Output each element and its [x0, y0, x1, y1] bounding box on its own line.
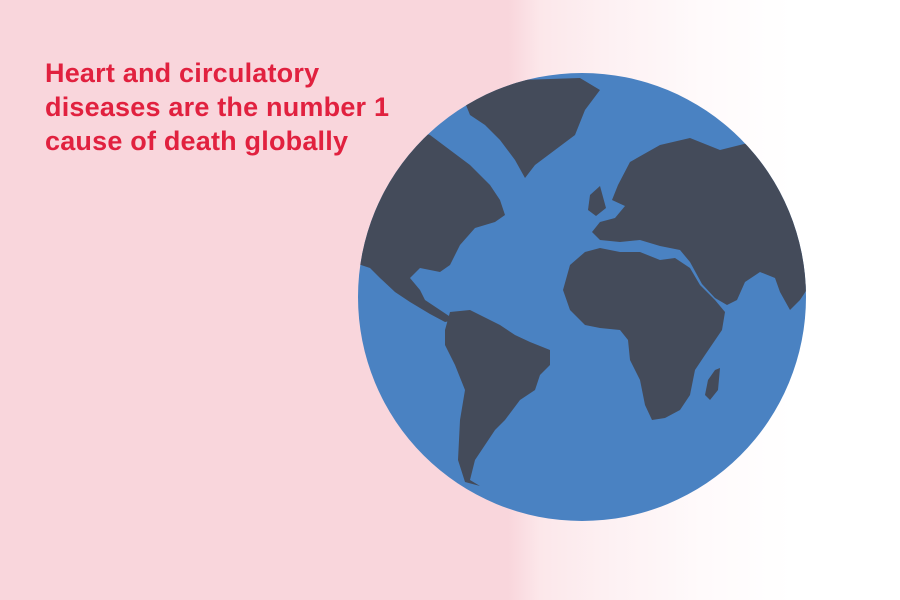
title: Heart and circulatory — [45, 58, 319, 88]
Eurasia — [592, 138, 806, 310]
Africa — [563, 248, 725, 420]
Madagascar — [705, 368, 720, 400]
UK — [588, 186, 606, 216]
title — [45, 58, 389, 156]
South America — [445, 310, 550, 486]
North America — [360, 134, 505, 322]
globe — [358, 73, 806, 521]
title: cause of death globally — [45, 126, 348, 156]
title: diseases are the number 1 — [45, 92, 389, 122]
Greenland — [462, 78, 600, 178]
ocean — [358, 73, 806, 521]
continents — [340, 78, 830, 486]
